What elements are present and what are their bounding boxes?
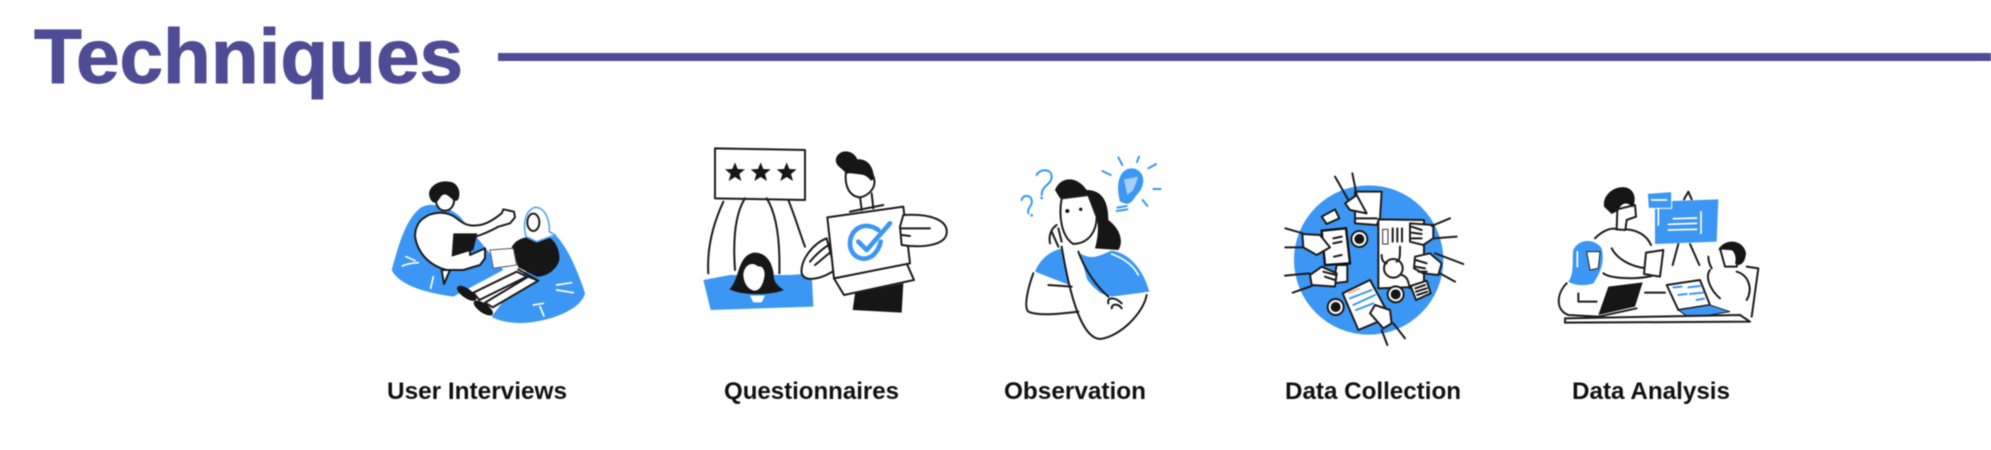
man holding check card bbox=[802, 151, 947, 313]
coffee cups bbox=[1328, 231, 1404, 315]
presentation board bbox=[1647, 192, 1718, 265]
blue table bbox=[1294, 185, 1443, 335]
seated man bbox=[415, 181, 515, 284]
question marks bbox=[1022, 170, 1052, 217]
seated person at right bbox=[1708, 242, 1758, 317]
card and calculator bbox=[1322, 209, 1431, 300]
illustration: user interviews bbox=[392, 181, 585, 323]
tablet and left hands bbox=[1285, 228, 1350, 293]
table bbox=[1565, 315, 1750, 323]
illustration: questionnaires bbox=[703, 148, 947, 313]
thinking woman bbox=[1026, 179, 1149, 339]
report with pointing hand bbox=[1343, 280, 1405, 345]
light bulb bbox=[1102, 157, 1161, 211]
title rule bbox=[498, 53, 1991, 61]
blue bean bags bbox=[392, 205, 585, 323]
large chart sheet and hands bbox=[1378, 218, 1463, 288]
black laptop bbox=[1598, 282, 1665, 317]
label: user interviews: User Interviews bbox=[387, 378, 567, 405]
top paper and hand bbox=[1335, 173, 1382, 225]
illustration: data collection bbox=[1285, 173, 1463, 345]
label: questionnaires: Questionnaires bbox=[724, 378, 899, 405]
woman in blue headscarf bbox=[1559, 241, 1607, 317]
seated woman in scarf bbox=[455, 207, 559, 318]
open laptop with data bbox=[1667, 280, 1730, 318]
title: Techniques bbox=[34, 14, 463, 100]
label: observation: Observation bbox=[1004, 378, 1146, 405]
label: data collection: Data Collection bbox=[1285, 378, 1461, 405]
illustration: data analysis bbox=[1559, 187, 1758, 323]
standing man bbox=[1595, 187, 1663, 280]
rating sign with stars bbox=[708, 148, 805, 273]
woman holding sign bbox=[703, 253, 813, 310]
label: data analysis: Data Analysis bbox=[1572, 378, 1730, 405]
illustration: observation bbox=[1022, 157, 1161, 339]
